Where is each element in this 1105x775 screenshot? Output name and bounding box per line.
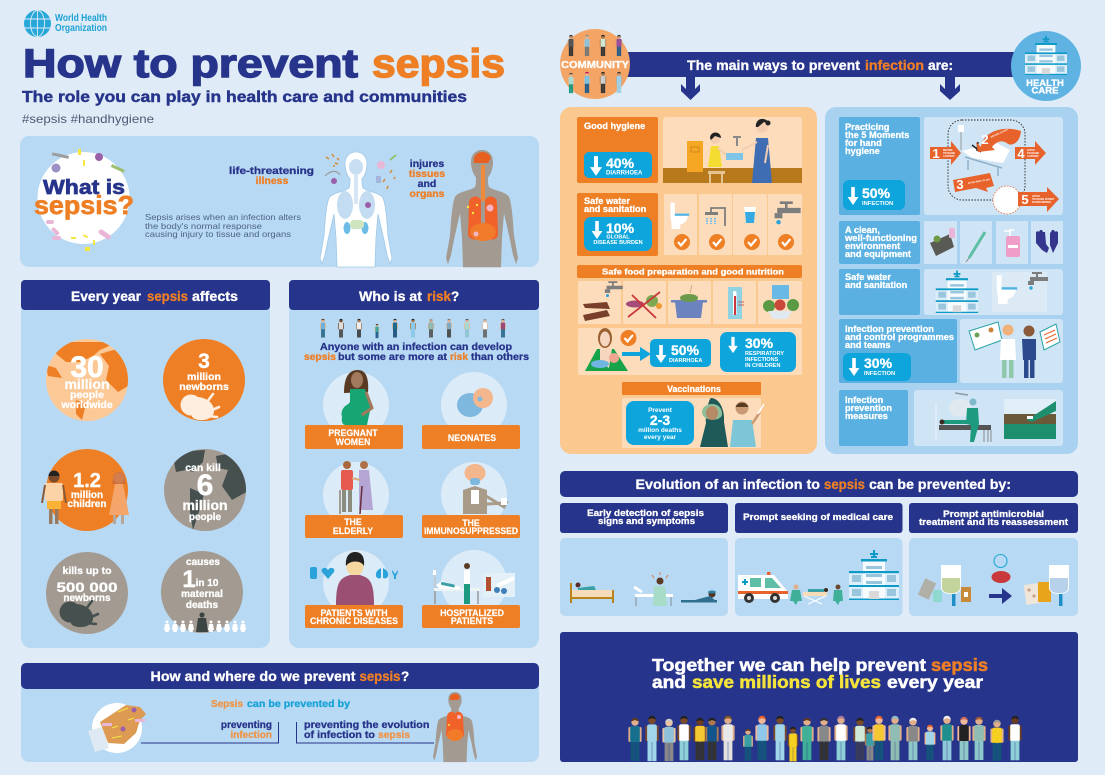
arrow: moment 4: TOUCHING — [1027, 153, 1039, 155]
risk group: hospitalized patients — [422, 550, 520, 628]
risk group: pregnant women: PREGNANT — [328, 428, 378, 438]
arrow: moment 1 — [930, 141, 961, 165]
tile: gloves — [1031, 221, 1063, 264]
arrow: moment 4: 4 — [1017, 146, 1025, 161]
stat circle: 30 million people worldwide — [46, 339, 130, 421]
arrow: community — [681, 77, 700, 100]
header bar: Evolution of an infection to — [636, 476, 820, 492]
pill: 30% infection: 30% — [864, 355, 893, 371]
stat circle: can kill 6 million people: can kill — [185, 462, 221, 474]
text block: definition — [145, 212, 301, 239]
block: safe water and sanitation — [577, 193, 658, 256]
stat circle: can kill 6 million people: million — [182, 497, 228, 513]
pill: 30% respiratory infections: IN CHILDREN — [745, 363, 780, 369]
label: life-threatening illness: illness — [256, 175, 289, 187]
heading: sepsis can be prevented by — [211, 699, 350, 710]
arrow: moment 5: TOUCHING PATIENT — [1032, 198, 1055, 201]
arrow: moment 5: 5 — [1021, 192, 1029, 207]
header bar: ? — [451, 289, 459, 304]
pill: 30% respiratory infections: RESPIRATORY — [745, 351, 784, 357]
pill: 40% diarrhoea: DIARRHOEA — [606, 170, 643, 176]
arrow: moment 2: BEFORE CLEAN/ — [990, 128, 1009, 139]
text: together we can help: save millions of lives — [692, 672, 881, 692]
pill: 30% infection — [843, 353, 911, 381]
stat circle: 3 million newborns — [163, 339, 245, 421]
illustration: five moments diagram — [924, 117, 1063, 215]
tile: thermometer — [713, 281, 756, 324]
row of eleven people — [320, 319, 506, 338]
label: life-threatening illness: life-threatening — [229, 165, 314, 177]
block: safe water and sanitation: and sanitation — [584, 204, 647, 214]
pill: prevent 2-3 million deaths: every year — [644, 434, 677, 441]
header bar — [21, 663, 539, 689]
text block: definition: Sepsis arises when an infection alters — [145, 212, 301, 222]
stat circle: kills up to 500 000 newborns: newborns — [63, 593, 111, 604]
badge: health care: HEALTH — [1026, 78, 1064, 89]
illustration: hospital, toilet and tap — [924, 269, 1063, 315]
arrow: moment 4: AFTER — [1027, 149, 1035, 152]
block: safe water and sanitation: Safe water — [845, 272, 891, 282]
block: infection prevention programmes: and teams — [845, 340, 890, 350]
stat circle: kills up to 500 000 newborns: kills up to — [62, 565, 112, 577]
block: clean environment: and equipment — [845, 249, 911, 259]
panel: who is at risk — [289, 280, 539, 648]
text: together we can help: and — [652, 672, 686, 692]
badge: health care — [1011, 31, 1081, 101]
stat circle: 30 million people worldwide: people — [70, 389, 104, 401]
text block: anyone can develop sepsis: risk — [450, 351, 468, 363]
stat circle: can kill 6 million people: 6 — [197, 469, 213, 502]
arrow: moment 3 — [953, 173, 994, 192]
bar: vaccinations — [622, 382, 761, 395]
header bar — [560, 471, 1078, 497]
heading: sepsis can be prevented by: can be prevented by — [247, 699, 350, 710]
pill: 10% global disease burden: 10% — [606, 220, 635, 236]
pill: 50% infection: 50% — [862, 185, 891, 201]
block: good hygiene: Good hygiene — [584, 121, 645, 131]
icon: mother breastfeeding — [585, 328, 628, 371]
WHO logo — [24, 10, 107, 37]
pill: 10% global disease burden: DISEASE BURDEN — [593, 240, 643, 246]
block: clean environment: environment — [845, 241, 900, 251]
text: together we can help: every year — [887, 672, 983, 692]
block: 5 moments — [839, 117, 920, 215]
icon: hand with germs — [88, 703, 146, 753]
label: injures tissues and organs: organs — [409, 188, 445, 200]
stat circle: 1.2 million children: 1.2 — [73, 470, 101, 492]
risk group: pregnant women: WOMEN — [336, 437, 370, 447]
label: injures tissues and organs: and — [418, 178, 436, 190]
stat circle: causes 1 in 10 maternal deaths: in 10 — [196, 578, 219, 589]
risk group: the immunosuppressed: IMMUNOSUPPRESSED — [424, 526, 518, 536]
icon: white fetus — [180, 394, 219, 420]
risk group: neonates — [422, 372, 520, 449]
pill: 30% respiratory infections: 30% — [745, 335, 774, 351]
bar: safe food preparation — [577, 265, 802, 278]
column: prompt antimicrobial treatment — [909, 503, 1078, 616]
arrow: moment 1: BEFORE — [943, 150, 953, 152]
pill: prevent 2-3 million deaths: million deaths — [638, 427, 682, 434]
pill: 40% diarrhoea: 40% — [606, 155, 635, 171]
pill: 50% infection — [843, 180, 905, 210]
block: safe water and sanitation: Safe water — [584, 196, 630, 206]
risk group: hospitalized patients: PATIENTS — [451, 616, 493, 626]
header bar: How and where do we prevent — [150, 669, 356, 684]
panel: evolution to sepsis — [560, 471, 1078, 616]
column: early detection: signs and symptoms — [598, 516, 695, 527]
risk group: the elderly: ELDERLY — [333, 526, 373, 536]
logo wordmark: Organization — [55, 22, 107, 34]
stat circle: causes 1 in 10 maternal deaths: 1 — [182, 566, 196, 593]
text block: anyone can develop sepsis: Anyone with an infection can develop — [320, 341, 512, 353]
illustration: operating room — [914, 390, 1063, 446]
icon: ambulance — [738, 572, 788, 603]
block: clean environment: well-functioning — [844, 233, 917, 243]
stat circle: can kill 6 million people: people — [189, 512, 222, 523]
header bar: main ways to prevent infection: infection — [865, 57, 924, 73]
illustration: body with damaged organs — [446, 150, 518, 267]
stat circle: causes 1 in 10 maternal deaths: deaths — [186, 600, 219, 611]
row of people — [628, 716, 1022, 761]
bar: safe food preparation: Safe food preparation and good nutrition — [602, 266, 784, 276]
risk group: the immunosuppressed: THE — [462, 518, 480, 528]
arrow: moment 4 — [1015, 141, 1046, 165]
risk group: the elderly: THE — [344, 517, 362, 527]
header bar: main ways to prevent infection — [625, 52, 1020, 77]
badge: health care: CARE — [1032, 86, 1058, 96]
header bar: main ways to prevent infection: are: — [928, 57, 953, 73]
icon: white circle with germs — [38, 149, 130, 251]
pill: 50% diarrhoea: 50% — [671, 342, 700, 358]
text block: anyone can develop sepsis: sepsis — [304, 351, 336, 363]
header bar: sepsis — [360, 669, 400, 684]
heading: What is sepsis?: What is — [43, 177, 125, 199]
icon: WHO emblem — [24, 10, 51, 37]
stat circle: 3 million newborns: million — [187, 371, 221, 383]
heading: What is sepsis?: sepsis? — [34, 190, 134, 220]
block: clean environment: A clean, — [845, 225, 880, 235]
stat circle: 1.2 million children — [42, 449, 129, 531]
tile: raw food crossed — [623, 281, 666, 324]
stat circle: 30 million people worldwide: worldwide — [60, 399, 113, 411]
block: infection prevention measures: Infection — [845, 395, 884, 405]
risk group: patients with chronic diseases — [305, 550, 403, 628]
panel: what is sepsis — [20, 136, 539, 267]
icon: surroundings circle — [993, 186, 1021, 214]
block: good hygiene — [577, 117, 658, 183]
stat circle: kills up to 500 000 newborns — [46, 552, 128, 634]
pill: 30% infection: INFECTION — [864, 371, 895, 377]
stat circle: 30 million people worldwide: million — [64, 376, 110, 392]
tile: syringe — [960, 221, 992, 264]
arrow: moment 3: 3 — [956, 177, 964, 192]
icon: patient in bed — [571, 582, 614, 603]
block: infection prevention measures: prevention — [845, 403, 892, 413]
header bar: ? — [401, 669, 409, 684]
stat circle: 30 million people worldwide: 30 — [70, 351, 104, 384]
header bar: sepsis — [147, 289, 188, 304]
panel: health care measures — [825, 107, 1078, 454]
people: top row — [568, 35, 622, 56]
badge: community: COMMUNITY — [561, 59, 629, 71]
block: 5 moments: for hand — [845, 138, 882, 148]
icon: stretcher with paramedics — [790, 584, 843, 605]
header bar: sepsis — [824, 476, 865, 492]
tile: tap — [768, 194, 802, 255]
illustration: healthy body with germs — [320, 152, 396, 267]
panel: community measures — [560, 107, 817, 454]
header bar — [289, 280, 539, 310]
column: prompt antimicrobial treatment: Prompt antimicrobial — [943, 509, 1044, 520]
block: infection prevention programmes: and control programmes — [845, 332, 954, 342]
pill: 10% global disease burden — [584, 217, 652, 251]
header bar: affects — [192, 289, 238, 304]
pill: 10% global disease burden: GLOBAL — [606, 234, 630, 240]
title: How to prevent — [23, 42, 358, 86]
risk group: patients with chronic diseases: CHRONIC DISEASES — [310, 616, 398, 626]
logo wordmark — [55, 12, 107, 34]
header bar: main ways to prevent infection: The main ways to prevent — [687, 57, 860, 73]
risk group: pregnant women — [305, 370, 403, 449]
title — [23, 42, 505, 86]
arrow: moment 5 — [1018, 187, 1059, 212]
label: injures tissues and organs — [409, 158, 445, 200]
illustration: body with organs — [433, 692, 477, 762]
column: early detection: Early detection of sepsis — [587, 508, 704, 519]
icon: medicines after — [1024, 565, 1069, 606]
pill: 40% diarrhoea — [584, 152, 652, 178]
risk group: the elderly — [305, 461, 403, 538]
tile: toilet — [664, 194, 697, 255]
risk group: patients with chronic diseases: PATIENTS WITH — [320, 608, 388, 618]
arrow: moment 1: A PATIENT — [943, 155, 955, 158]
branch: preventing the evolution of infection to sepsis: preventing the evolution — [304, 720, 430, 731]
header bar: risk — [427, 289, 451, 304]
hashtags: #sepsis #handhygiene — [22, 112, 154, 126]
stat circle: causes 1 in 10 maternal deaths: maternal — [181, 589, 223, 600]
panel: every year sepsis affects — [21, 280, 270, 648]
icon: dark fetus — [60, 601, 98, 627]
icon: confused patient — [634, 572, 673, 606]
arrow: moment 5: SURROUNDINGS — [1032, 202, 1051, 204]
subtitle: The role you can play in health care and communities — [22, 89, 467, 106]
tile: glass of water — [733, 194, 767, 255]
header bar: Who is at — [359, 289, 423, 304]
text block: definition: causing injury to tissue and organs — [145, 229, 291, 239]
header bar: Every year — [71, 289, 142, 304]
stat circle: kills up to 500 000 newborns: 500 000 — [56, 579, 118, 595]
pill: 50% diarrhoea: DIARRHOEA — [669, 358, 702, 364]
branch: preventing the evolution of infection to sepsis: of infection to — [304, 730, 375, 741]
heading: What is sepsis? — [34, 177, 134, 220]
icon: ten women row — [164, 612, 246, 632]
text block: definition: the body's normal response — [145, 221, 262, 231]
stat circle: 3 million newborns: newborns — [179, 381, 229, 393]
block: infection prevention programmes: Infection prevention — [845, 324, 934, 334]
block: 5 moments: Practicing — [845, 122, 889, 132]
arrow: moment 1: TOUCHING — [943, 153, 955, 155]
illustration: woman and health worker — [700, 398, 764, 447]
pill: prevent 2-3 million deaths — [626, 401, 694, 445]
pill: 30% respiratory infections: INFECTIONS — [745, 357, 779, 363]
pill: 50% infection: INFECTION — [862, 201, 893, 207]
arrow: moment 4: A PATIENT — [1027, 155, 1039, 158]
icon: boy — [42, 470, 66, 524]
header bar — [21, 280, 270, 310]
icon: medicines before — [918, 565, 971, 606]
label: life-threatening illness — [229, 165, 314, 187]
icon: person collapsed — [681, 590, 717, 602]
pill: prevent 2-3 million deaths: Prevent — [648, 407, 673, 414]
branch: preventing the evolution of infection to sepsis: sepsis — [378, 730, 410, 741]
title: sepsis — [372, 42, 505, 86]
icon: girl — [109, 472, 129, 524]
icon: hospital — [1025, 36, 1067, 75]
stat circle: causes 1 in 10 maternal deaths — [161, 551, 246, 633]
arrow: health care — [940, 77, 960, 100]
block: infection prevention measures: measures — [845, 411, 888, 421]
block: 5 moments: hygiene — [845, 146, 880, 156]
branch: preventing the evolution of infection to sepsis — [296, 720, 434, 743]
tile: shower — [699, 194, 732, 255]
branch: preventing infection — [141, 720, 278, 743]
stat circle: 1.2 million children: children — [68, 499, 106, 510]
block: infection prevention measures — [839, 390, 908, 446]
column: prompt antimicrobial treatment: treatment and its reassessment — [919, 517, 1069, 528]
column: early detection — [560, 503, 728, 616]
risk group: neonates: NEONATES — [448, 433, 496, 443]
tile: hand rub bottle — [996, 221, 1028, 264]
badge: community — [560, 29, 630, 99]
label: injures tissues and organs: tissues — [409, 168, 445, 180]
people: bottom row — [568, 72, 622, 93]
arrow: moment 2 — [976, 128, 1021, 152]
stat circle: 1.2 million children: million — [71, 490, 103, 501]
block: clean environment — [839, 221, 920, 264]
column: prompt seeking of medical care — [735, 503, 902, 616]
block: breastfeeding — [578, 328, 802, 375]
panel: call to action — [560, 632, 1078, 762]
tile: cooking pot — [668, 281, 711, 324]
icon: check mark — [620, 330, 636, 346]
tile: cleaning equipment — [924, 221, 957, 264]
risk group: hospitalized patients: HOSPITALIZED — [440, 608, 504, 618]
text block: anyone can develop sepsis — [304, 341, 529, 363]
tile: washed vegetables — [758, 281, 802, 324]
text block: anyone can develop sepsis: but some are more at — [338, 351, 448, 363]
block: 5 moments: the 5 Moments — [845, 130, 909, 140]
pill: prevent 2-3 million deaths: 2-3 — [650, 412, 670, 428]
stat circle: can kill 6 million people — [164, 449, 250, 531]
text: together we can help — [652, 655, 988, 692]
risk group: the immunosuppressed — [422, 462, 520, 538]
block: safe water and sanitation — [839, 269, 920, 315]
block: vaccinations illustration — [622, 398, 764, 448]
arrow: breastfeeding to 50% — [622, 347, 651, 361]
label: injures tissues and organs: injures — [410, 158, 444, 170]
panel: how and where do we prevent sepsis — [21, 663, 539, 762]
text: together we can help: Together we can help prevent — [652, 655, 926, 675]
icon: red pill — [992, 571, 1010, 583]
branch: preventing infection: infection — [230, 730, 272, 741]
column: prompt seeking of medical care: Prompt seeking of medical care — [743, 512, 893, 523]
icon: hospital — [849, 550, 899, 600]
pill: 30% respiratory infections — [720, 332, 796, 372]
text: together we can help: sepsis — [931, 655, 988, 675]
arrow: moment 3: AFTER BODY FLUID — [968, 178, 990, 185]
arrow: moment 5: AFTER — [1032, 195, 1040, 198]
tile: washing hands under tap — [578, 281, 623, 324]
logo wordmark: World Health — [55, 12, 107, 24]
block: infection prevention programmes — [839, 319, 957, 383]
bar: vaccinations: Vaccinations — [667, 384, 721, 394]
illustration: child washing hands — [663, 117, 802, 183]
arrow: treatment reassessment — [989, 588, 1012, 604]
stat circle: causes 1 in 10 maternal deaths: causes — [186, 557, 220, 568]
arrow: moment 1: 1 — [932, 146, 940, 161]
pill: 50% diarrhoea — [650, 339, 711, 367]
text block: anyone can develop sepsis: than others — [471, 351, 529, 363]
branch: preventing infection: preventing — [221, 720, 272, 731]
illustration: team with guidelines — [960, 319, 1063, 383]
block: safe water and sanitation: and sanitation — [845, 280, 908, 290]
stat circle: 3 million newborns: 3 — [198, 350, 210, 373]
icon: clock — [994, 554, 1007, 568]
heading: sepsis can be prevented by: Sepsis — [211, 699, 243, 710]
arrow: moment 2: 2 — [981, 132, 989, 147]
header bar: can be prevented by: — [869, 476, 1011, 492]
